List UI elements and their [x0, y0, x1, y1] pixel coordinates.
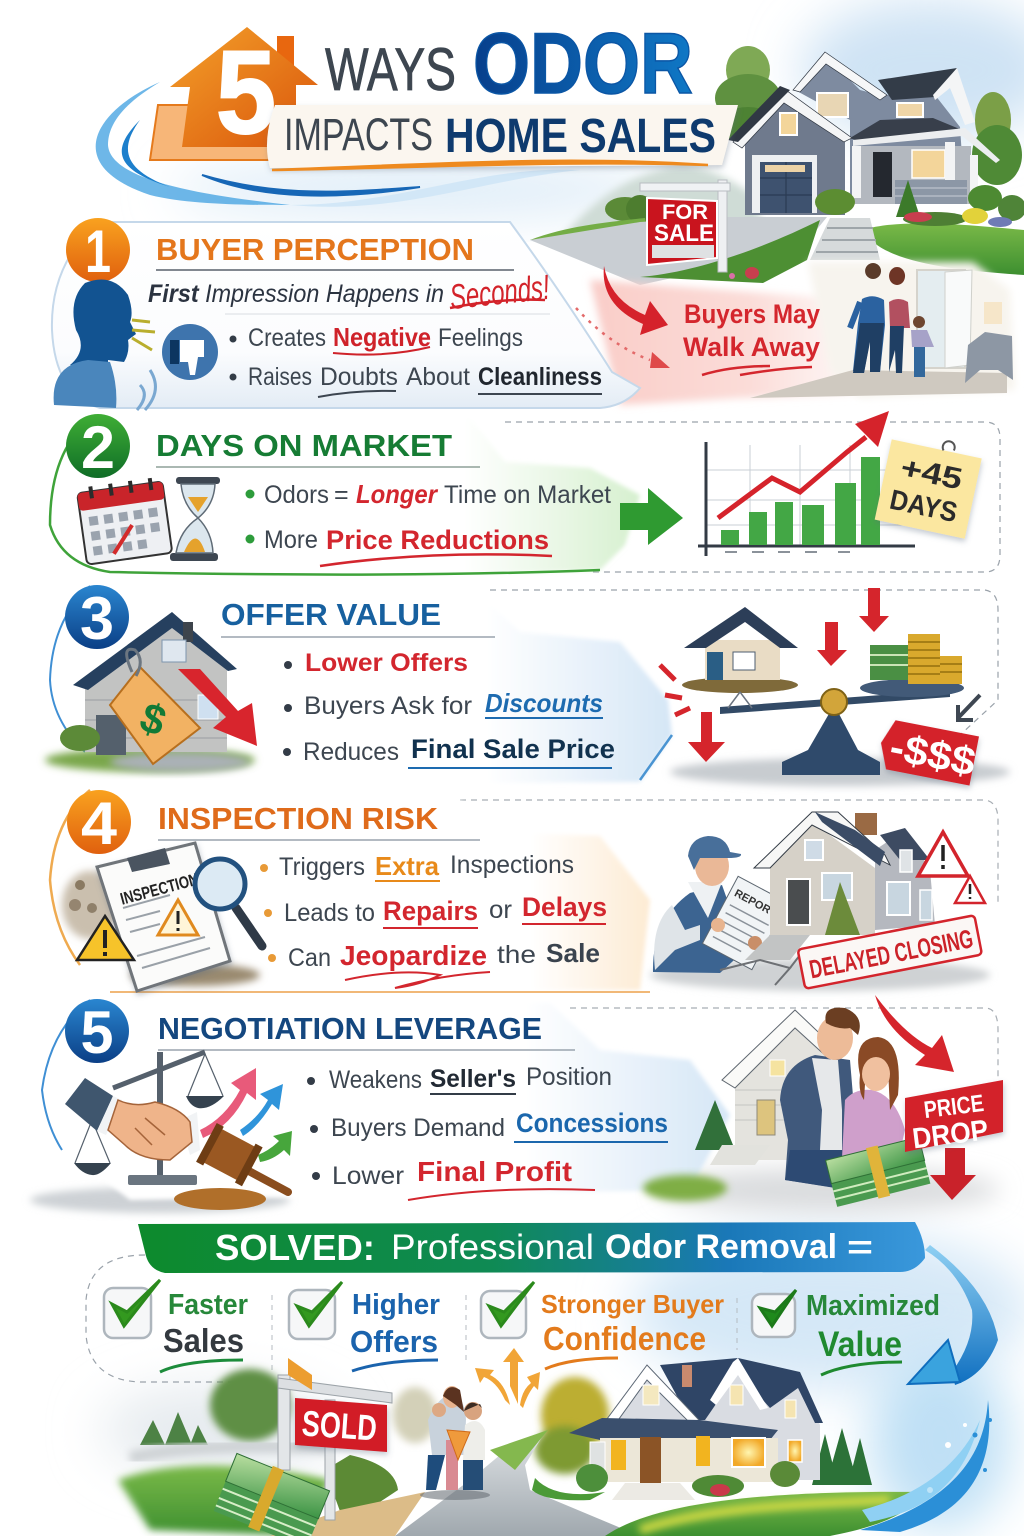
scale — [157, 1052, 163, 1178]
house: left gable wall — [745, 98, 845, 215]
benefit: higher offers — [289, 1282, 466, 1371]
bullets: Seller's — [430, 1065, 516, 1093]
woman — [842, 1090, 905, 1160]
house: plants — [815, 189, 855, 215]
walls — [85, 622, 227, 752]
panel shape — [50, 586, 672, 785]
house: garage — [752, 155, 817, 213]
red walk-away backdrop — [590, 280, 880, 405]
bullets: Doubts — [320, 363, 398, 391]
number badge: 4 — [81, 790, 118, 857]
heading: INSPECTION RISK — [158, 801, 439, 836]
icon: rising orange arrows — [475, 1348, 540, 1408]
illustration: family leaving — [750, 262, 1015, 398]
trees and steps — [695, 1100, 735, 1150]
body — [653, 885, 745, 973]
illustration: water splash — [860, 1400, 992, 1532]
bullets: Weakens — [329, 1066, 422, 1094]
report: REPORT — [732, 887, 779, 920]
roof — [660, 1358, 823, 1423]
for sale sign: FOR — [662, 201, 708, 224]
right wing — [875, 830, 935, 930]
bullets: Reduces — [303, 738, 399, 766]
number badge: 5 — [80, 999, 114, 1066]
trees and far hills — [560, 46, 1022, 240]
number badge — [66, 414, 130, 481]
benefit: faster sales: Faster — [168, 1289, 248, 1321]
house: lower porch roof — [850, 118, 962, 140]
bullets — [260, 851, 607, 988]
panel shape — [50, 418, 640, 575]
arrow: green — [620, 488, 683, 545]
windows and door — [805, 840, 823, 860]
bullets — [307, 1063, 668, 1200]
number badge — [67, 790, 131, 857]
house walls — [735, 1020, 835, 1160]
benefit: higher offers: Higher — [352, 1289, 440, 1321]
tagline: First Impression Happens in — [148, 280, 444, 308]
icon: calendar — [76, 476, 172, 565]
heading: BUYER PERCEPTION — [156, 232, 474, 267]
roof — [754, 812, 890, 868]
bullets: the — [497, 941, 536, 969]
sign: price drop: PRICE — [922, 1090, 985, 1124]
tagline — [148, 268, 552, 317]
panel: 1 buyer perception — [52, 218, 1015, 410]
cuffs — [65, 1078, 113, 1131]
icon: gavel — [174, 1123, 288, 1210]
house: upper gable — [793, 52, 887, 100]
number badge — [65, 585, 129, 652]
heading: OFFER VALUE — [221, 597, 441, 632]
bottom sold scene — [118, 1348, 992, 1536]
callout: buyers may walk away: Walk Away — [683, 332, 820, 362]
warning triangle — [77, 916, 134, 960]
house: back upper wall — [795, 55, 965, 200]
icon: warning triangles — [918, 832, 985, 903]
panel: 3 offer value — [45, 585, 1010, 786]
house: porch wall — [853, 146, 971, 204]
armchair — [965, 332, 1013, 383]
title block: ODOR — [473, 16, 693, 112]
title: ribbon — [267, 105, 738, 168]
dashed frame — [86, 1255, 240, 1382]
icon: thumbs down — [137, 324, 218, 410]
banner: = — [847, 1229, 873, 1265]
house — [728, 52, 1024, 227]
heading: NEGOTIATION LEVERAGE — [158, 1011, 542, 1046]
magnifier — [236, 908, 262, 946]
cracked ground — [650, 959, 990, 991]
solved section — [86, 1222, 998, 1385]
bullets: Jeopardize — [340, 940, 487, 971]
sticky note: +45 days — [875, 429, 984, 539]
arrow — [178, 669, 257, 746]
benefit: stronger buyer confidence: Stronger Buyer — [541, 1289, 724, 1319]
number badge: 1 — [85, 218, 111, 285]
scale post — [782, 712, 880, 775]
left pan with house — [682, 607, 798, 708]
ground shadow — [670, 758, 1010, 786]
board — [97, 843, 230, 991]
chart: rising bars — [698, 411, 915, 556]
bullets: Can — [288, 944, 331, 972]
steps and shrubs — [612, 1483, 695, 1500]
panel shape — [50, 790, 650, 990]
child — [913, 316, 925, 328]
man — [780, 1055, 855, 1190]
bullets: Sale — [546, 938, 600, 968]
banner: SOLVED: — [215, 1227, 375, 1268]
number badge: 2 — [81, 414, 115, 481]
bullets: Position — [526, 1063, 612, 1091]
benefit: stronger buyer confidence — [481, 1282, 737, 1369]
title: orange house with number 5: 5 — [216, 27, 276, 159]
room backdrop — [808, 262, 1015, 398]
title: first line: WAYS — [325, 36, 456, 103]
illustration: glowing house — [569, 1358, 823, 1500]
bullets: Buyers Demand — [331, 1114, 505, 1142]
illustration: inspector — [653, 836, 788, 973]
benefit: maximized value: Value — [818, 1325, 902, 1364]
bullets: or — [489, 896, 512, 924]
bullets — [283, 649, 615, 768]
bullets: Discounts — [485, 688, 603, 718]
illustration: money stack — [213, 1452, 330, 1536]
number badge — [65, 999, 129, 1066]
panel shape — [52, 222, 640, 408]
house: right upper roof — [878, 68, 957, 100]
tag — [110, 667, 200, 764]
illustration: happy family — [420, 1386, 490, 1500]
illustration: balance scale — [660, 588, 980, 786]
main wall — [770, 822, 875, 935]
background trees, lawns and road — [118, 1369, 925, 1536]
steps and cracks — [745, 935, 810, 960]
illustration: house and couple — [643, 1008, 905, 1201]
bullets: Time on Market — [444, 481, 611, 509]
head — [695, 846, 729, 886]
floor — [750, 370, 1007, 398]
number badge — [66, 218, 130, 285]
dashed frame — [570, 1008, 998, 1080]
bullets: Longer — [356, 479, 439, 509]
bullets — [230, 322, 602, 397]
bullets — [246, 479, 611, 566]
bullets: Final Profit — [417, 1156, 572, 1187]
bullets: Cleanliness — [478, 363, 602, 391]
callout: buyers may walk away — [683, 299, 820, 375]
title: second line: IMPACTS — [284, 109, 433, 160]
icon: inspection clipboard — [62, 843, 262, 991]
title block — [150, 16, 738, 170]
dashed frame — [490, 590, 998, 735]
dashed frame — [460, 800, 998, 905]
dashed frame — [505, 422, 1000, 572]
bullets: Triggers — [279, 853, 365, 881]
bullets: Price Reductions — [326, 525, 549, 555]
panel: 4 inspection risk — [50, 790, 998, 992]
bush — [60, 725, 100, 751]
for sale sign — [640, 180, 759, 279]
benefit: faster sales — [104, 1280, 272, 1375]
benefit: maximized value: Maximized — [806, 1290, 940, 1322]
icon: person smelling — [54, 279, 155, 408]
walls — [610, 1370, 820, 1478]
icon: scales and handshake — [65, 1052, 224, 1185]
illustration: money stack — [825, 1135, 931, 1209]
stamp: delayed closing — [798, 915, 982, 989]
bullets: Extra — [375, 851, 440, 881]
for sale sign: SALE — [654, 220, 714, 247]
tagline: Seconds! — [448, 268, 552, 317]
benefit: faster sales: Sales — [163, 1322, 244, 1359]
ground shadow — [30, 1187, 290, 1213]
hands — [108, 1100, 192, 1160]
price tag: -$$$: -$$$ — [886, 725, 979, 785]
red down arrows — [660, 588, 889, 762]
header swooshes — [96, 82, 580, 207]
lawn and driveway — [530, 217, 1024, 285]
sign: sold — [278, 1358, 392, 1520]
title block: HOME SALES — [445, 110, 716, 163]
benefit: stronger buyer confidence: Confidence — [543, 1320, 706, 1357]
roof — [73, 612, 237, 690]
icon: house with price tag — [45, 612, 257, 772]
man — [865, 263, 881, 279]
callout: buyers may walk away: Buyers May — [684, 299, 820, 329]
icon: inspection clipboard: INSPECTION — [118, 870, 200, 909]
sticky note: +45 days: +45 — [898, 451, 965, 496]
bullets: Delays — [522, 892, 607, 922]
bullets: Feelings — [438, 324, 523, 352]
bullets: Lower — [332, 1162, 404, 1190]
bullets: Raises — [248, 363, 312, 391]
heading: DAYS ON MARKET — [156, 428, 452, 463]
illustration: cracked house — [720, 812, 935, 985]
number badge: 3 — [80, 585, 114, 652]
sticky note: +45 days: DAYS — [887, 484, 960, 528]
banner — [138, 1222, 925, 1273]
sign: price drop — [875, 995, 1003, 1200]
bullets: Negative — [333, 322, 431, 352]
bullets: = — [334, 481, 349, 509]
panel: 5 negotiation leverage — [30, 995, 1003, 1213]
blue arrow swoosh — [908, 1245, 998, 1385]
lawn — [45, 748, 255, 772]
arrow: red curved — [576, 266, 670, 368]
windows and door — [590, 1442, 605, 1470]
icon: house with price tag: $ — [134, 693, 172, 745]
woman — [889, 267, 905, 285]
banner: Odor Removal — [605, 1228, 837, 1266]
bullets: Odors — [264, 481, 329, 509]
bullets: Creates — [248, 324, 326, 352]
bullets: Inspections — [450, 851, 574, 879]
benefit: higher offers: Offers — [350, 1324, 438, 1359]
bullets: About — [406, 363, 470, 391]
porch roof — [569, 1418, 778, 1440]
benefit: maximized value — [752, 1290, 940, 1375]
bullets: Buyers Ask for — [304, 692, 472, 720]
dirt — [62, 871, 118, 939]
sign: price drop: DROP — [911, 1114, 990, 1155]
sign: sold: SOLD — [301, 1402, 378, 1449]
bullets: Concessions — [516, 1108, 668, 1138]
panel shape — [42, 1000, 730, 1200]
bush — [825, 882, 860, 935]
bullets: More — [264, 526, 318, 554]
bullets: Final Sale Price — [411, 734, 615, 764]
title: orange house with number 5 — [150, 27, 318, 160]
icon: hourglass — [170, 477, 220, 561]
bullets: Repairs — [383, 896, 478, 926]
icon: rising arrows — [200, 1068, 292, 1162]
bullets: Leads to — [284, 899, 375, 927]
bullets: Lower Offers — [305, 649, 468, 677]
right pan with money and coins — [860, 634, 964, 697]
panel: 2 days on market — [50, 411, 1000, 575]
header house scene — [530, 46, 1024, 285]
banner: Professional — [391, 1228, 594, 1267]
